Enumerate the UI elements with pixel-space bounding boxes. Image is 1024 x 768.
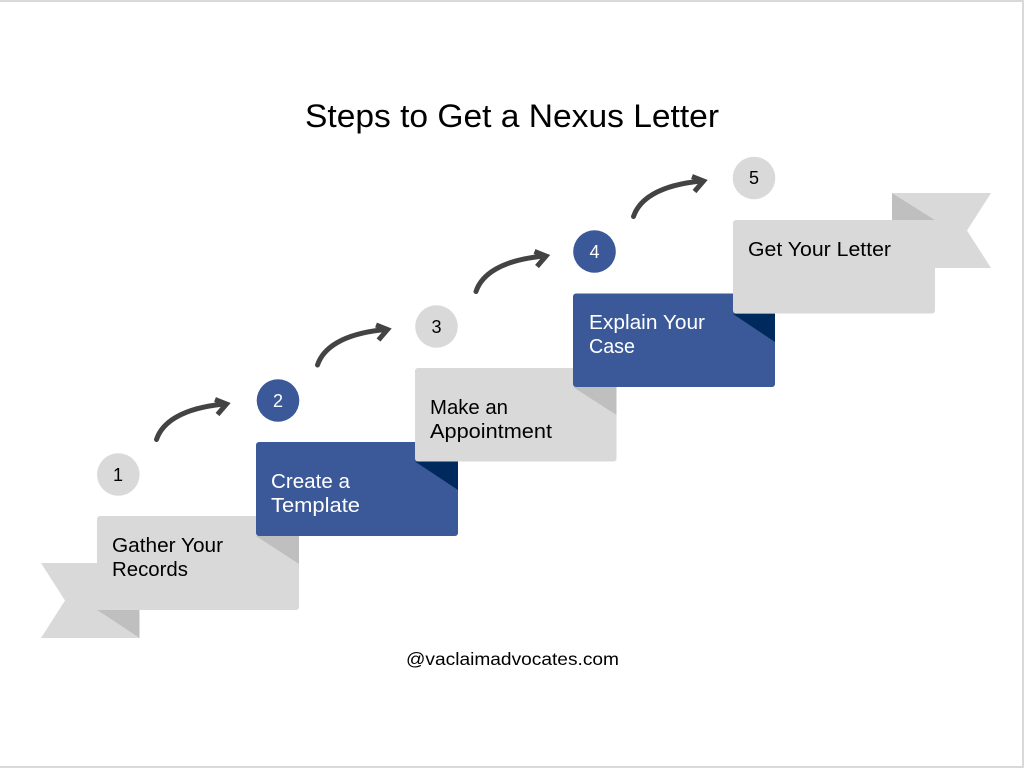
- arrow: step 3 to 4: [476, 252, 546, 292]
- step 5 label: Get Your Letter: [748, 239, 891, 261]
- step 2 label: Template: [271, 495, 360, 517]
- step 3 number badge: [415, 305, 458, 348]
- ribbon tail: step 5: [892, 193, 991, 268]
- step 5 number badge: 5: [749, 168, 759, 188]
- step 1 label: Gather Your: [112, 535, 223, 557]
- step 4 label: Explain Your: [589, 312, 705, 334]
- step 1 label: Records: [112, 559, 188, 581]
- ribbon tail: step 1: [41, 563, 140, 638]
- arrow: step 2 to 3: [318, 325, 388, 365]
- step 1 card: [97, 516, 299, 610]
- step 1 number badge: 1: [113, 465, 123, 485]
- step 2 number badge: 2: [273, 391, 283, 411]
- arrow: step 4 to 5: [634, 176, 704, 216]
- step 3 number badge: 3: [431, 317, 442, 337]
- step 4 label: Case: [589, 336, 635, 358]
- arrow: step 1 to 2: [156, 400, 226, 440]
- step 3 label: Appointment: [430, 421, 552, 443]
- step 5 number badge: [733, 157, 775, 199]
- title: Steps to Get a Nexus Letter: [305, 98, 719, 134]
- step 4 card: [573, 294, 775, 387]
- step 1 number badge: [97, 453, 140, 496]
- step 4 number badge: 4: [589, 242, 600, 262]
- step 3 label: Make an: [430, 397, 508, 419]
- step 2 label: Create a: [271, 471, 351, 493]
- step 3 card: [415, 368, 616, 462]
- step 4 number badge: [573, 230, 616, 273]
- step 5 card: [733, 220, 935, 314]
- step 2 card: [256, 442, 458, 536]
- step 2 number badge: [257, 379, 299, 422]
- website handle: @vaclaimadvocates.com: [406, 649, 619, 669]
